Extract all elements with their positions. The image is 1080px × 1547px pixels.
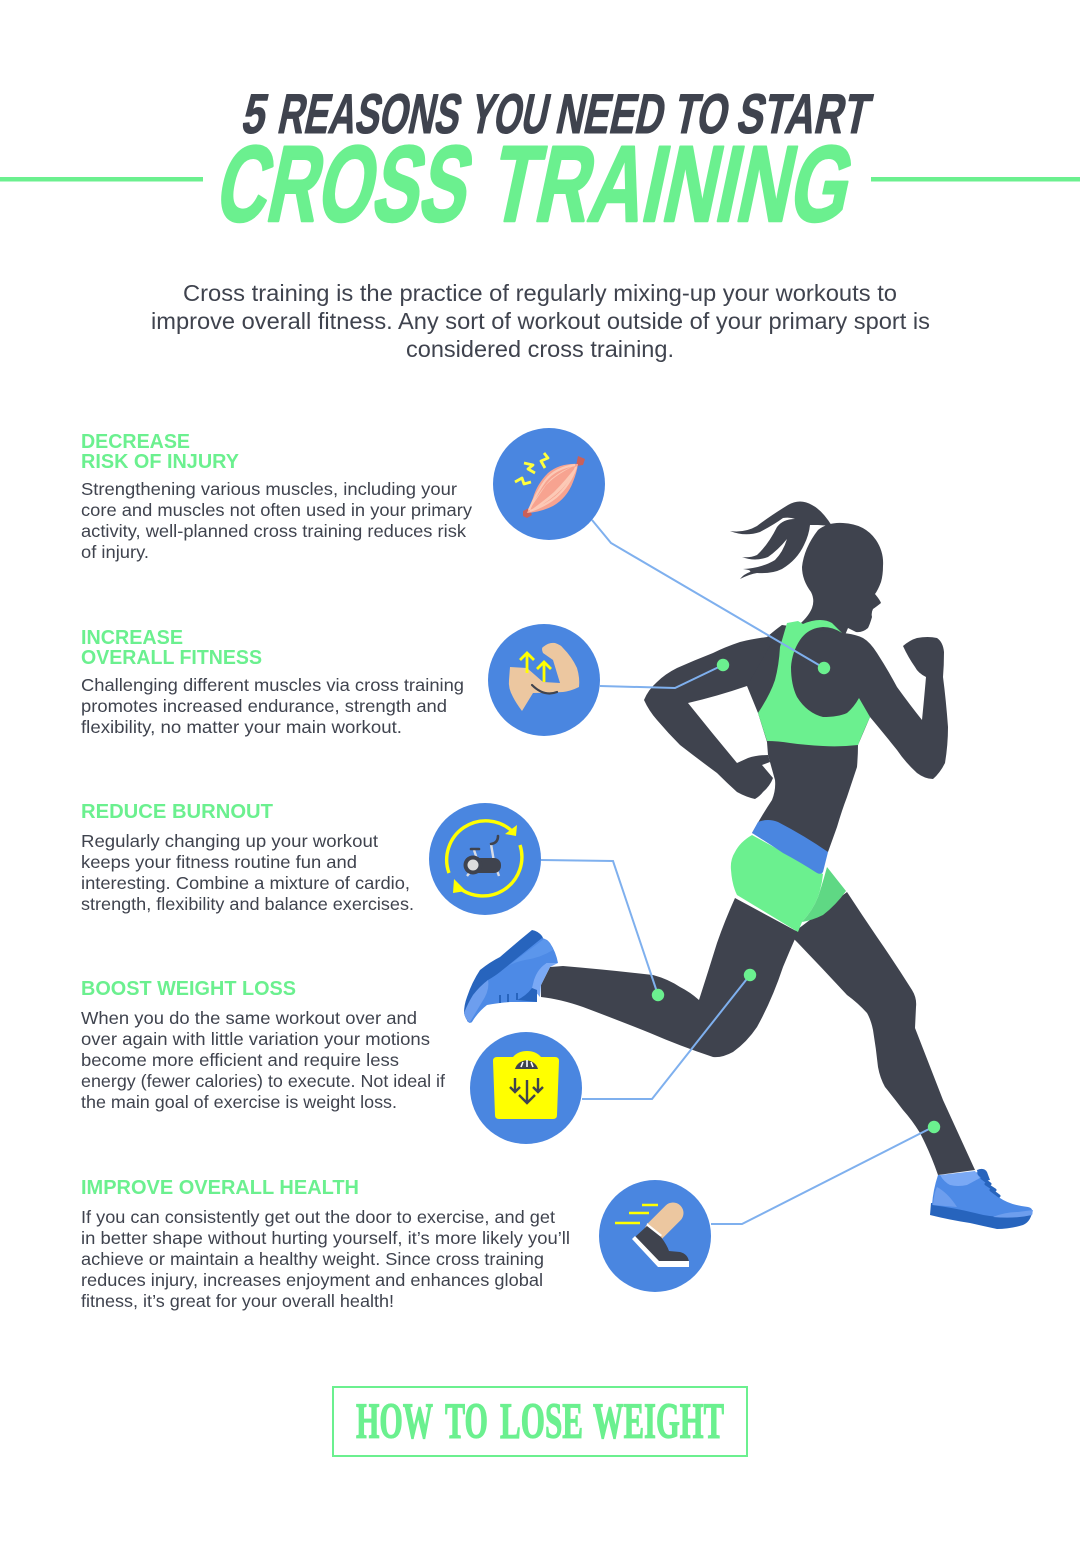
text block: reduce burnout: strength, flexibility and balance exercises.	[81, 894, 414, 914]
text block: increase overall fitness	[81, 627, 464, 737]
intro text: considered cross training.	[406, 336, 674, 362]
marker dots	[652, 659, 940, 1133]
title line: 5 reasons: YOU	[465, 83, 556, 145]
text block: boost weight loss	[81, 978, 445, 1112]
head and neck	[795, 523, 883, 640]
text block: boost weight loss: energy (fewer calories) to execute. Not ideal if	[81, 1071, 445, 1091]
front shoe	[930, 1169, 1033, 1229]
text block: improve overall health: If you can consistently get out the door to exercise, and get	[81, 1207, 555, 1227]
icon: muscle	[493, 428, 605, 540]
text block: reduce burnout	[81, 801, 414, 914]
text block: decrease risk of injury: of injury.	[81, 542, 149, 562]
text block: boost weight loss: the main goal of exercise is weight loss.	[81, 1092, 397, 1112]
icon: running shoe	[599, 1180, 711, 1292]
button: how to lose weight	[333, 1387, 747, 1456]
shorts darker panel	[802, 867, 846, 922]
title line: cross training	[208, 124, 865, 245]
text block: boost weight loss: over again with little variation your motions	[81, 1029, 430, 1049]
runner figure	[464, 502, 1033, 1229]
shorts waistband	[752, 820, 828, 874]
text block: decrease risk of injury: Strengthening various muscles, including your	[81, 479, 457, 499]
right title rule	[871, 177, 1080, 182]
torso and front arm	[747, 625, 948, 852]
ponytail hair	[730, 502, 832, 579]
title line: 5 reasons: 5	[237, 83, 274, 145]
button: how to lose weight: LOSE	[500, 1394, 583, 1450]
button: how to lose weight: HOW	[356, 1394, 433, 1450]
intro text: Cross training is the practice of regularly mixing-up your workouts to	[183, 280, 897, 306]
text block: improve overall health: in better shape without hurting yourself, it’s more likely you’ll	[81, 1228, 570, 1248]
text block: boost weight loss: BOOST WEIGHT LOSS	[81, 978, 296, 1000]
text block: improve overall health	[81, 1177, 570, 1311]
front leg	[790, 892, 975, 1175]
text block: improve overall health: IMPROVE OVERALL HEALTH	[81, 1177, 359, 1199]
text block: increase overall fitness: flexibility, no matter your main workout.	[81, 717, 402, 737]
icon: weighing scale	[470, 1032, 582, 1144]
shorts	[731, 835, 823, 932]
icon: flexed arm	[488, 624, 600, 736]
text block: reduce burnout: interesting. Combine a mixture of cardio,	[81, 873, 410, 893]
intro text: improve overall fitness. Any sort of workout outside of your primary sport is	[151, 308, 930, 334]
text block: decrease risk of injury: RISK OF INJURY	[81, 451, 240, 473]
text block: increase overall fitness: Challenging different muscles via cross training	[81, 675, 464, 695]
back shoe	[464, 930, 558, 1023]
text block: decrease risk of injury: activity, well-planned cross training reduces risk	[81, 521, 466, 541]
sports bra	[758, 620, 870, 746]
text block: decrease risk of injury: DECREASE	[81, 431, 190, 453]
title line: 5 reasons: NEED	[551, 83, 672, 145]
text block: boost weight loss: become more efficient and require less	[81, 1050, 399, 1070]
title	[0, 83, 1080, 245]
text block: increase overall fitness: INCREASE	[81, 627, 183, 649]
title line: 5 reasons	[237, 83, 877, 145]
title line: 5 reasons: REASONS	[273, 83, 468, 145]
back leg	[541, 898, 798, 1057]
text block: improve overall health: reduces injury, increases enjoyment and enhances global	[81, 1270, 543, 1290]
text block: reduce burnout: Regularly changing up your workout	[81, 831, 378, 851]
text block: decrease risk of injury	[81, 431, 472, 562]
button: how to lose weight: WEIGHT	[593, 1394, 724, 1450]
button: how to lose weight: TO	[445, 1394, 488, 1450]
text block: reduce burnout: REDUCE BURNOUT	[81, 801, 273, 823]
icon: exercise bike with cycle arrows	[429, 803, 541, 915]
left title rule	[0, 177, 203, 182]
text block: increase overall fitness: promotes increased endurance, strength and	[81, 696, 447, 716]
title line: cross training: TRAINING	[482, 124, 865, 245]
text block: increase overall fitness: OVERALL FITNESS	[81, 647, 262, 669]
intro text	[151, 280, 930, 362]
text block: improve overall health: fitness, it’s great for your overall health!	[81, 1291, 394, 1311]
title line: cross training: CROSS	[208, 124, 484, 245]
title line: 5 reasons: TO	[669, 83, 736, 145]
text block: reduce burnout: keeps your fitness routine fun and	[81, 852, 357, 872]
text block: decrease risk of injury: core and muscles not often used in your primary	[81, 500, 472, 520]
back arm	[644, 625, 790, 799]
text block: boost weight loss: When you do the same workout over and	[81, 1008, 417, 1028]
text block: improve overall health: achieve or maintain a healthy weight. Since cross training	[81, 1249, 544, 1269]
title line: 5 reasons: START	[732, 83, 877, 145]
connector lines	[541, 520, 933, 1224]
